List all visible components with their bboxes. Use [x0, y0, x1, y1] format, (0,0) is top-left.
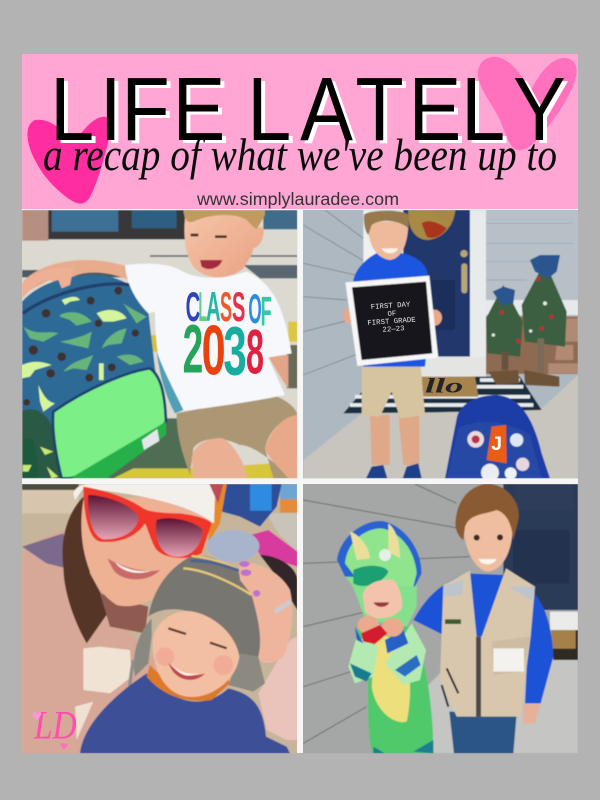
photo: toddler with dinosaur backpack: [20, 205, 300, 485]
orange luggage tag: [487, 425, 507, 463]
bystander in blue: [222, 484, 282, 527]
shirt text: 2: [183, 311, 203, 387]
boy head: [463, 503, 513, 572]
shirt text: C: [186, 283, 200, 330]
photo frame backing: [22, 209, 578, 753]
toddler head: [183, 210, 264, 277]
shirt text: L: [198, 283, 207, 330]
photo: mother and toddler selfie: [20, 480, 300, 760]
toddler arm: [22, 260, 128, 298]
woman's face: [81, 497, 213, 606]
door: [503, 484, 578, 610]
pompom: [207, 530, 259, 562]
shirt text: S: [220, 283, 232, 330]
toddler shorts: [177, 395, 297, 478]
toddler hat: [148, 556, 261, 660]
photo: brothers in dinosaur and explorer costumes: [300, 480, 580, 760]
woman's hand: [238, 563, 292, 663]
explorer vest: [440, 568, 535, 717]
letter board frame: [345, 276, 438, 366]
brick and planters: [486, 317, 578, 374]
woman's neck: [100, 593, 148, 633]
shirt text: S: [232, 283, 245, 330]
shirt text: 8: [246, 318, 264, 388]
toddler hands and candy: [358, 616, 379, 634]
photo: boy with first day letter board: [300, 205, 580, 485]
white shirt: [125, 264, 292, 412]
letter board text: [368, 302, 416, 332]
toddler jacket: [80, 673, 290, 753]
shirt text: 0: [202, 310, 226, 389]
shirt text: O: [248, 285, 262, 332]
boy hand: [523, 704, 540, 723]
boy sweater: [413, 573, 553, 703]
sweatshirt: [22, 527, 160, 753]
icon: left heart: [27, 117, 110, 204]
pink bag: [250, 530, 297, 567]
hand on backpack: [58, 276, 72, 289]
green pocket: [53, 368, 166, 478]
dinosaur costume body: [350, 627, 433, 753]
toddler face: [153, 611, 239, 697]
woman's hair: [62, 497, 110, 643]
letter board text: FIRST DAY: [371, 301, 411, 312]
panel: pink title banner: [22, 54, 578, 209]
knit white hat: [73, 484, 215, 523]
backpack: [445, 395, 550, 478]
shirt text: 3: [223, 313, 247, 389]
icon: right heart: [478, 57, 577, 150]
porch floor: [303, 375, 578, 478]
boy head: [368, 222, 408, 260]
toddler face: [363, 580, 402, 618]
paw prints: [23, 287, 139, 406]
doormat: [343, 377, 542, 413]
title: LIFE LATELY: [50, 58, 566, 159]
porch floor: [427, 647, 578, 753]
front door: [403, 210, 470, 357]
letter board text: 22—23: [382, 325, 405, 335]
letter board text: OF: [387, 310, 397, 319]
dinosaur prints: [23, 303, 147, 372]
tag letter: J: [491, 434, 502, 455]
letter board text: FIRST GRADE: [367, 317, 417, 328]
shirt text: A: [206, 283, 221, 330]
boy hands: [342, 308, 352, 324]
title shadow: LIFE LATELY: [54, 61, 570, 162]
LD watermark logo: LD: [33, 702, 77, 747]
red sunglasses: [83, 487, 212, 558]
boy jeans: [449, 712, 517, 753]
hat ear flaps: [134, 618, 152, 677]
boy legs and shoes: [370, 415, 419, 465]
photo: toddler with dinosaur backpack: F: [261, 288, 272, 335]
boy shorts: [362, 365, 425, 418]
website url: www.simplylauradee.com: [196, 189, 399, 209]
toddler legs: [192, 438, 247, 478]
backpack: [22, 274, 156, 425]
woman's smile: [107, 558, 160, 579]
boy shirt: [353, 252, 432, 367]
wreath: [408, 210, 455, 240]
trees: [486, 262, 567, 357]
shirt text: [184, 292, 271, 376]
costume sleeves: [348, 637, 378, 683]
dinosaur hood: [345, 557, 417, 627]
shirt shadow tint: [157, 352, 183, 413]
door mat text: llo: [425, 375, 463, 397]
doormat: [552, 630, 578, 660]
